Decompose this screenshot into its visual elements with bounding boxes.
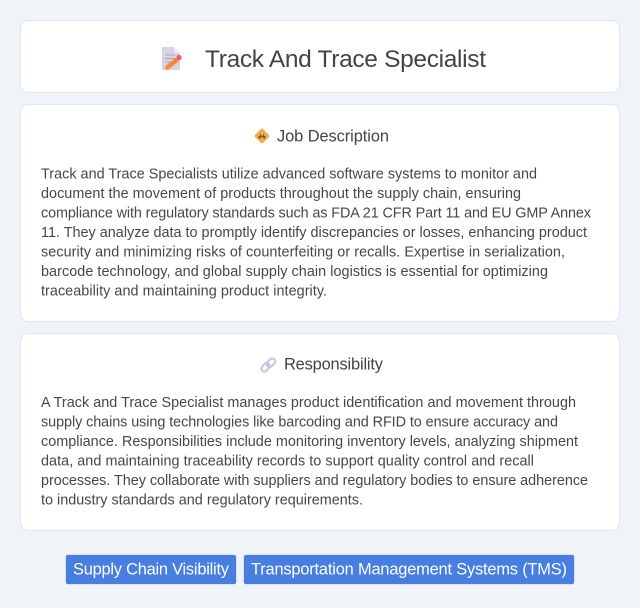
responsibility text: to industry standards and regulatory requirements. [41,492,363,508]
job description text: Track and Trace Specialists utilize advanced software systems to monitor and [41,166,537,182]
responsibility text: A Track and Trace Specialist manages product identification and movement through [41,395,576,411]
tag: transportation management systems [244,554,574,584]
job description text: security and minimizing risks of counterfeiting or recalls. Expertise in serialization, [41,244,565,260]
title text: Track And Trace Specialist [205,46,486,73]
panel: title header [20,20,620,92]
tag: supply chain visibility [66,554,236,584]
job description text: barcode technology, and global supply chain logistics is essential for optimizing [41,264,548,280]
icon: document with pencil [162,47,182,70]
panel: job description [20,104,620,322]
icon: orange diamond [254,128,270,144]
responsibility text [41,395,588,508]
tag: supply chain visibility: Supply Chain Visibility [73,560,230,578]
job description text: compliance with regulatory standards such as FDA 21 CFR Part 11 and EU GMP Annex [41,206,592,222]
job description text: traceability and maintaining product integrity. [41,284,327,300]
job description text: 11. They analyze data to promptly identify discrepancies or losses, enhancing product [41,225,587,241]
responsibility text: processes. They collaborate with suppliers and regulatory bodies to ensure adherence [41,473,588,489]
heading: responsibility: Responsibility [284,356,384,374]
tag: transportation management systems: Transportation Management Systems (TMS) [251,560,567,578]
job description text [41,166,592,300]
responsibility text: data, and maintaining traceability records to support quality control and recall [41,454,534,470]
heading: job description: Job Description [277,128,389,146]
responsibility text: compliance. Responsibilities include monitoring inventory levels, analyzing shipment [41,434,578,450]
job description text: document the movement of products throughout the supply chain, ensuring [41,186,521,202]
responsibility text: supply chains using technologies like barcoding and RFID to ensure accuracy and [41,414,558,430]
icon: chain link [260,357,276,373]
panel: responsibility [20,334,620,530]
